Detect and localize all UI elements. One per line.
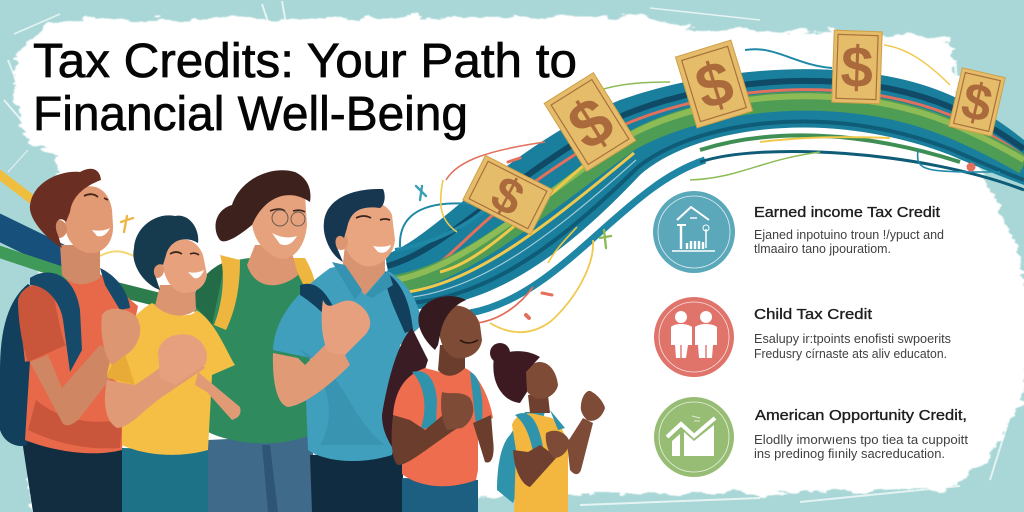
- text: American Opportunity description: ins predinog fiınily sacreducation.: [754, 447, 945, 461]
- icon: American Opportunity chart house: [654, 397, 734, 477]
- coin 2: $: [555, 82, 626, 164]
- text: American Opportunity description: [754, 433, 969, 461]
- text: earned income description: [754, 228, 944, 256]
- coin 4: [832, 30, 882, 104]
- heading: American Opportunity Credit: American Opportunity Credit,: [755, 407, 967, 424]
- person: green shirt woman: [192, 170, 322, 512]
- coin 5: $: [956, 71, 997, 135]
- icon: sparkles near figures: [121, 158, 976, 318]
- text: child tax credit description: Fredusry círnaste ats aliv educaton.: [754, 347, 947, 361]
- text: earned income description: Ejaned inpotuino troun !/ypuct and: [754, 228, 944, 242]
- text: child tax credit description: [754, 332, 951, 361]
- title: Financial Well-Being: [33, 88, 468, 141]
- coin 1: [461, 154, 554, 238]
- ribbon lower strands: [470, 160, 705, 313]
- coin 3: [675, 40, 753, 128]
- icon: earned income house and bars: [653, 191, 735, 273]
- text: child tax credit description: Esalupy ir:tpoints enofisti swpoerits: [754, 332, 951, 346]
- ribbon: flowing money path: [385, 45, 1024, 332]
- coin 2: [544, 73, 636, 171]
- title: Tax Credits: Your Path to: [33, 35, 577, 88]
- coin 4: $: [840, 34, 874, 101]
- person: red shirt man with backpack: [0, 169, 138, 512]
- ribbon thin curves: [400, 203, 480, 247]
- person: small girl with bun: [490, 343, 605, 512]
- text: American Opportunity description: Elodlly imorwıens tpo tiea ta cuppoitt: [754, 433, 969, 447]
- person: girl in coral shirt: [382, 296, 494, 512]
- heading: Child Tax Credit: Child Tax Credit: [754, 306, 873, 323]
- coin 1: $: [482, 165, 533, 227]
- ribbon main band: [385, 69, 1024, 310]
- heading: Earned income Tax Credit: Earned income Tax Credit: [754, 204, 941, 221]
- person: yellow shirt boy: [101, 215, 241, 512]
- person: blue polo man: [273, 189, 422, 512]
- title: [33, 35, 577, 141]
- left ribbons behind figures: [0, 172, 160, 300]
- icon: child tax credit people: [654, 297, 734, 377]
- coin 5: [949, 68, 1005, 136]
- text: earned income description: tlmaairo tano jpouratiom.: [754, 242, 891, 256]
- coin 3: $: [688, 47, 741, 123]
